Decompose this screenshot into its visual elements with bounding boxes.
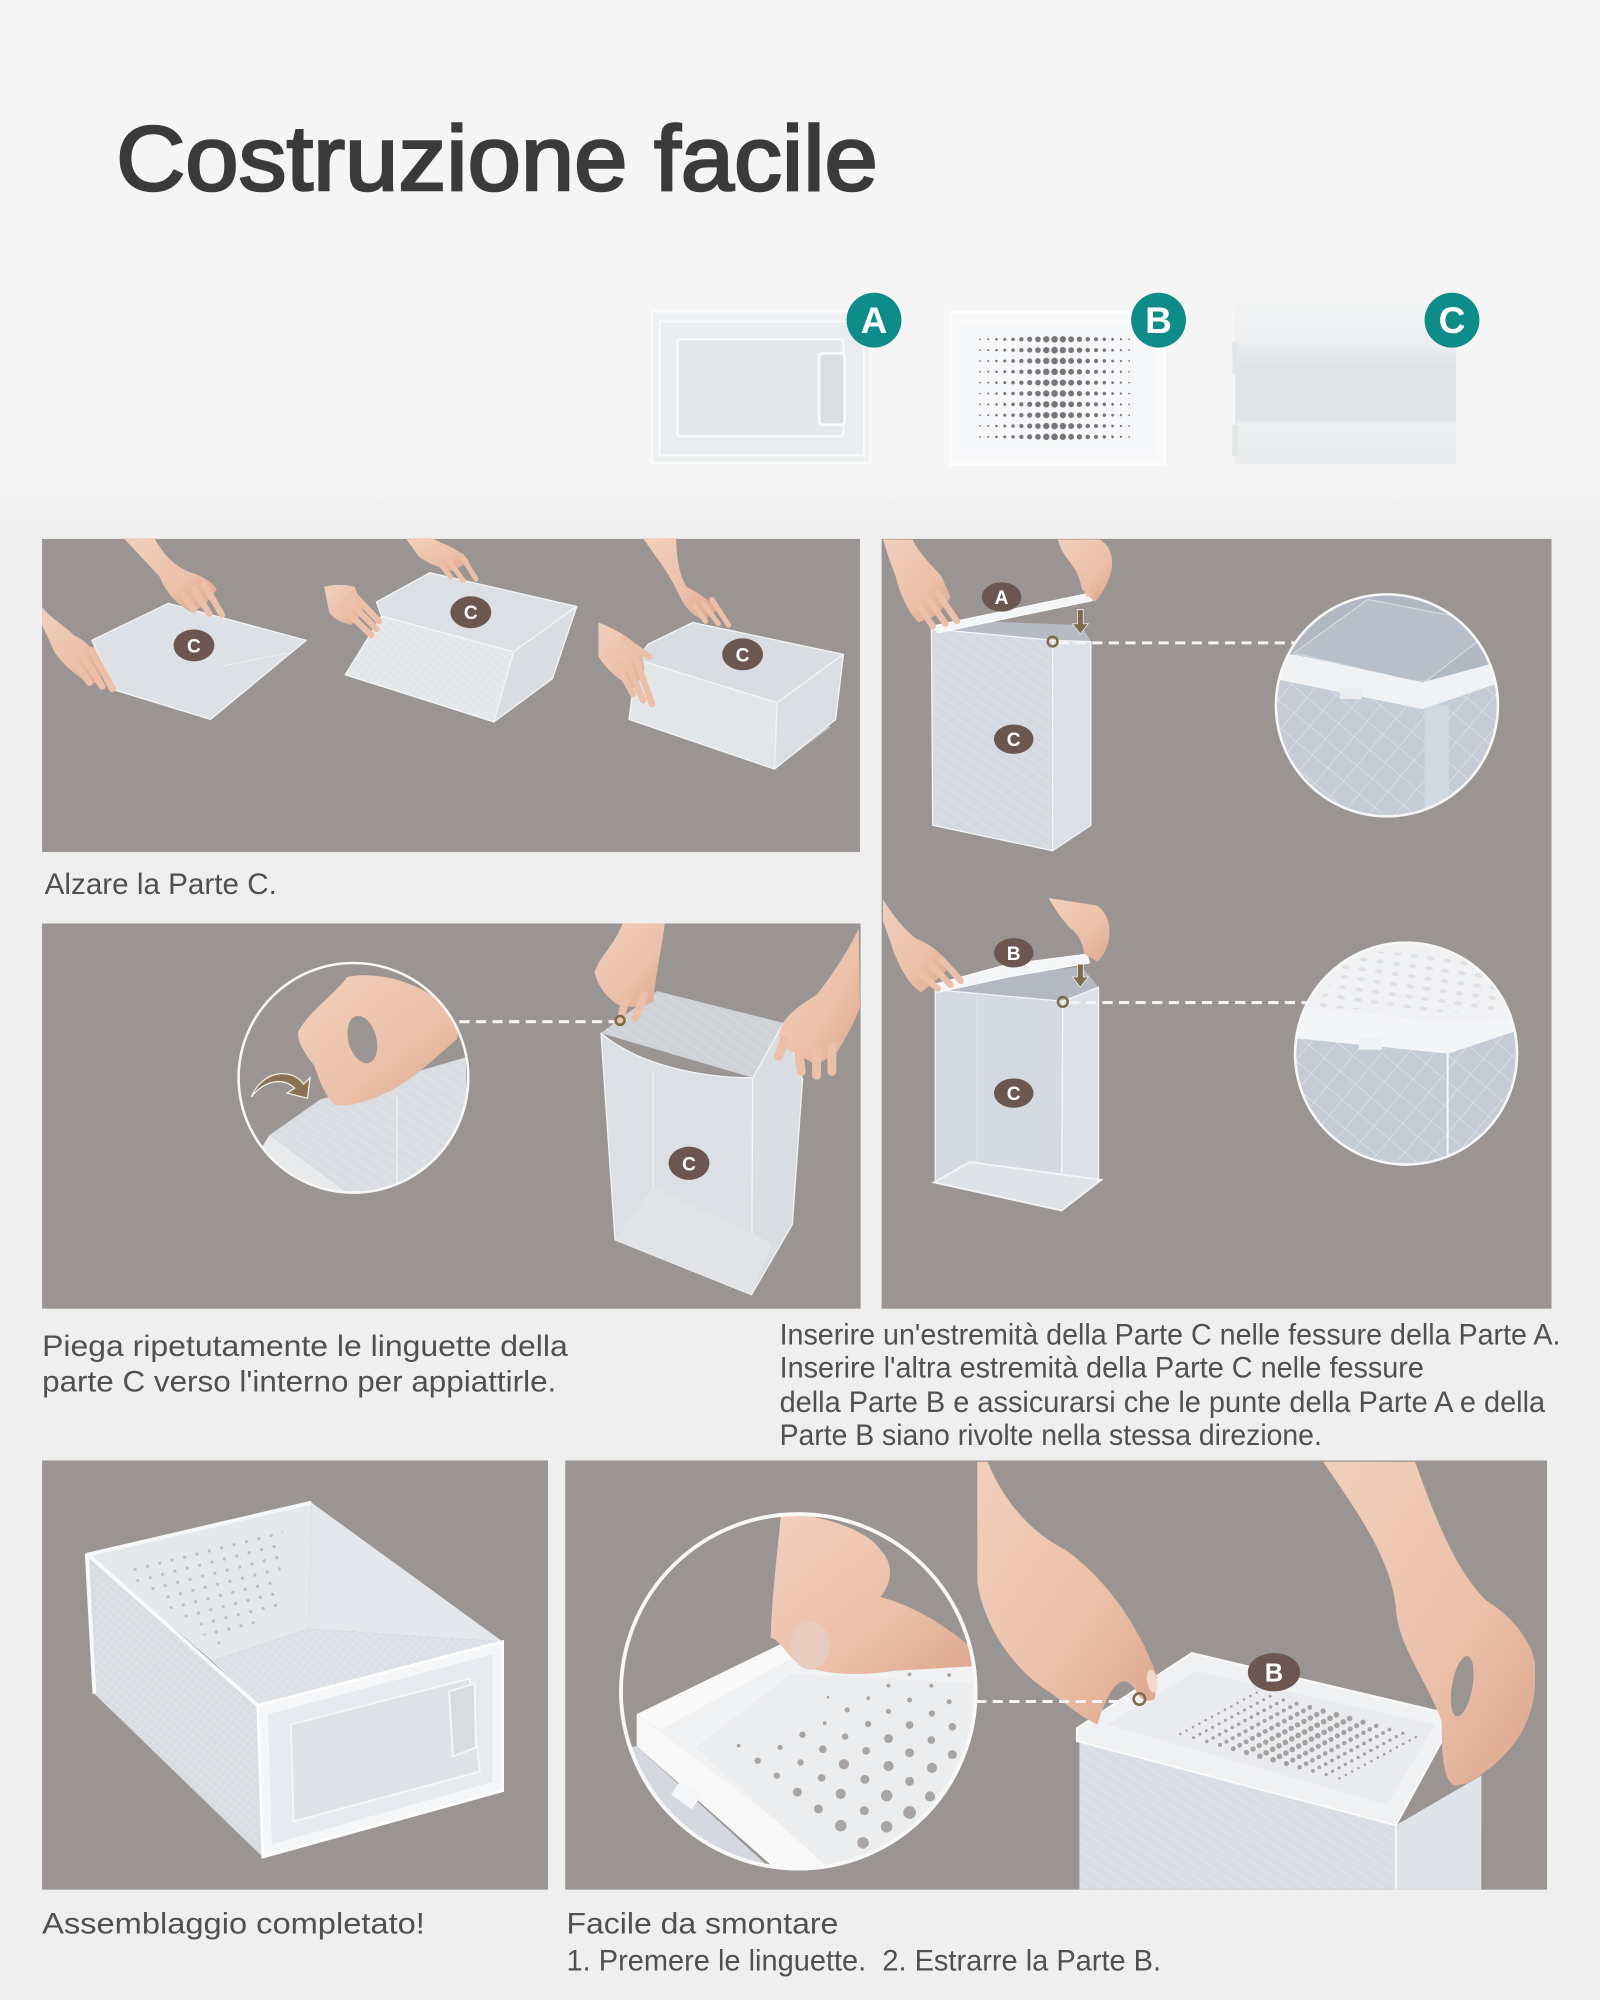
left hand [977, 1462, 1159, 1724]
hands with lid B [883, 898, 1110, 992]
badge C [174, 629, 214, 661]
inset circle: press tab [612, 1513, 982, 1875]
icon: curved arrow [251, 1074, 310, 1098]
panel: easy disassembly [565, 1460, 1547, 1890]
badge C [722, 638, 763, 670]
badge C: C [736, 645, 750, 666]
holes [737, 1672, 957, 1849]
lid B with holes [1077, 1653, 1456, 1825]
sheet 3 [629, 622, 843, 769]
inset circle: fold tab [239, 963, 470, 1199]
part A [652, 293, 901, 463]
front door [258, 1642, 503, 1857]
badge C: C [682, 1154, 696, 1175]
badge A [982, 582, 1021, 612]
hands holding box [595, 923, 860, 1075]
arrow down B [1072, 964, 1088, 987]
arrow down A [1072, 610, 1088, 634]
caption: easy disassembly: 1. Premere le linguette. 2. Estrarre la Parte B. [567, 1945, 1161, 1978]
badge C: C [187, 636, 201, 657]
floor [212, 1629, 503, 1705]
caption: insert part C: Parte B siano rivolte nella stessa direzione. [780, 1419, 1322, 1452]
sheet 2 [345, 573, 577, 722]
part B: B [1145, 300, 1172, 341]
caption: easy disassembly: Facile da smontare [567, 1908, 838, 1941]
title: Costruzione facile [116, 108, 878, 210]
dashed leader [1069, 1001, 1307, 1004]
caption: easy disassembly [567, 1908, 1161, 1978]
badge B [994, 938, 1033, 967]
panel: fold tabs [42, 923, 861, 1309]
box with lid B [933, 954, 1101, 1210]
caption: insert part C: Inserire un'estremità della Parte C nelle fessure della Parte A. [780, 1318, 1560, 1351]
panel: assembled box [42, 1460, 548, 1890]
badge C: C [464, 603, 478, 624]
hands with lid A [883, 540, 1112, 626]
dashed leader [1059, 642, 1295, 644]
sheet 1 [92, 603, 306, 719]
badge C: C [1007, 1084, 1021, 1105]
badge B: B [1007, 944, 1021, 965]
hands on sheet 1 [42, 538, 222, 689]
parts row: A, B, C [652, 293, 1479, 464]
badge C [669, 1147, 709, 1180]
part A: A [861, 300, 887, 341]
hands on sheet 2 [324, 538, 476, 635]
box with lid A [931, 593, 1092, 851]
right wall [309, 1503, 503, 1642]
dashed leader [459, 1020, 616, 1023]
badge C [450, 596, 491, 628]
caption: fold tabs: Piega ripetutamente le linguette della [42, 1330, 569, 1363]
box body [1079, 1742, 1481, 1890]
marker ring [616, 1016, 625, 1025]
badge C [994, 1078, 1033, 1108]
badge C: C [1007, 730, 1021, 751]
hands on sheet 3 [598, 538, 729, 704]
badge A: A [995, 588, 1009, 609]
marker ring [1134, 1693, 1145, 1705]
inset circle: lid B detail [1295, 941, 1517, 1167]
panel: raise part C [42, 538, 860, 852]
part B [951, 293, 1186, 464]
part C [1233, 293, 1479, 464]
inset circle: lid A detail [1276, 593, 1500, 820]
right hand [1323, 1462, 1535, 1786]
caption: fold tabs: parte C verso l'interno per appiattirle. [42, 1366, 556, 1399]
badge B [1248, 1653, 1300, 1691]
open box C [601, 991, 803, 1295]
top edge [87, 1503, 311, 1555]
marker ring [1058, 997, 1068, 1007]
badge C [994, 724, 1033, 754]
badge B: B [1265, 1660, 1283, 1688]
caption: raise part C: Alzare la Parte C. [45, 868, 277, 901]
panel: insert part C into A and B [882, 539, 1552, 1309]
caption: assembled: Assemblaggio completato! [42, 1908, 425, 1941]
left wall [87, 1554, 263, 1857]
caption: insert part C: della Parte B e assicurarsi che le punte della Parte A e della [780, 1386, 1546, 1419]
dashed leader [976, 1700, 1129, 1703]
back wall [87, 1503, 311, 1661]
part C: C [1439, 300, 1465, 341]
caption: insert part C: Inserire l'altra estremità della Parte C nelle fessure [780, 1352, 1424, 1385]
caption: insert part C [780, 1318, 1560, 1452]
caption: fold tabs [42, 1330, 569, 1399]
marker ring [1048, 637, 1057, 646]
